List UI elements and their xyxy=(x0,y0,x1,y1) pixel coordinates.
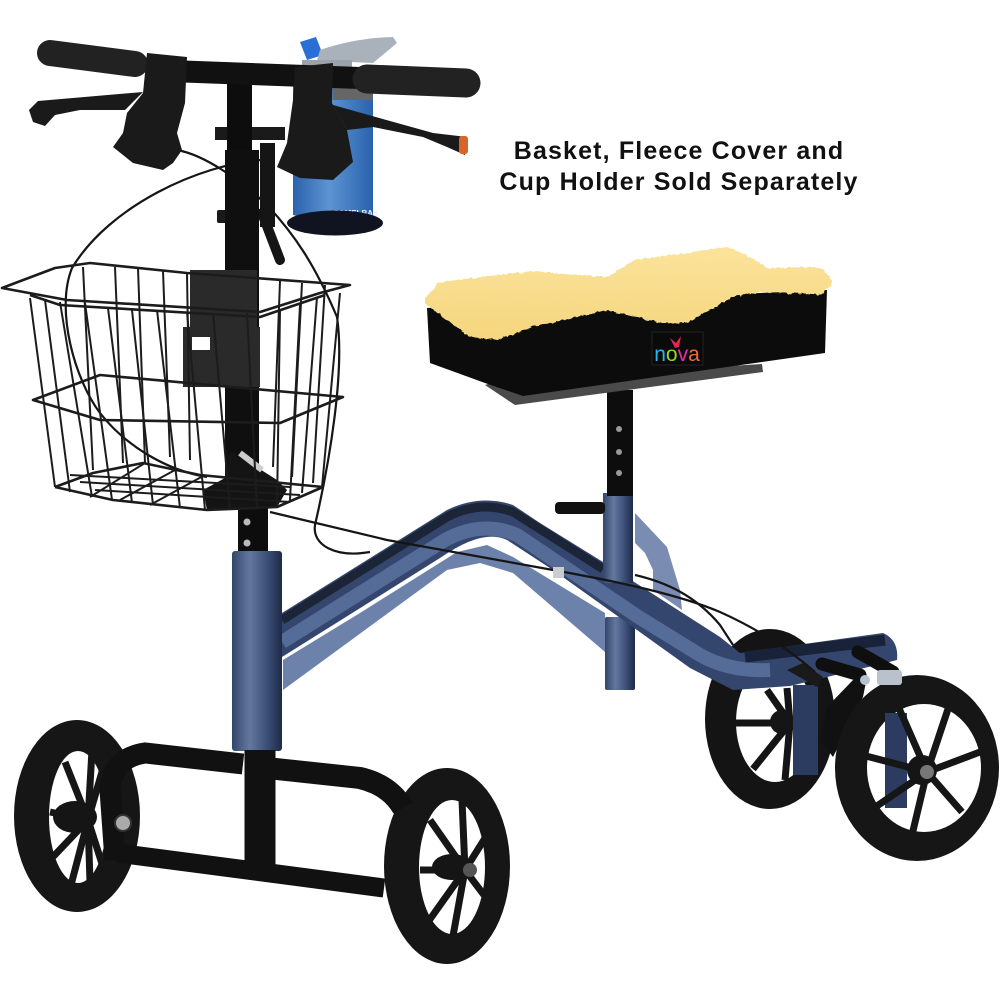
logo: nova xyxy=(652,332,703,366)
basket xyxy=(2,263,350,510)
steering tube xyxy=(232,505,282,751)
lower frame web plate xyxy=(283,545,605,690)
lower seat post socket xyxy=(605,617,635,690)
stem and rear bracket xyxy=(215,77,285,510)
handlebar xyxy=(50,53,466,83)
brake lever tip xyxy=(459,136,468,154)
cup holder xyxy=(287,210,383,236)
upper seat post socket xyxy=(603,493,633,583)
fleece cover xyxy=(425,247,832,340)
seat pad xyxy=(425,247,832,405)
water bottle xyxy=(293,37,397,220)
water bottle: CAMELBAK xyxy=(333,209,379,218)
rear back wheel xyxy=(705,629,835,809)
rear front wheel xyxy=(835,675,999,861)
seat post xyxy=(555,390,633,514)
brake cable xyxy=(66,150,815,672)
axle nut xyxy=(115,815,131,831)
basket lower mount xyxy=(203,450,287,510)
left brake lever xyxy=(29,92,143,126)
right brake clamp xyxy=(277,63,353,180)
rear fork plate xyxy=(820,677,867,757)
rear strut xyxy=(793,685,818,775)
logo: nova: nova xyxy=(654,343,700,366)
axle bolt and brake bracket xyxy=(787,663,902,687)
caption: sold separately note xyxy=(499,137,859,196)
left brake clamp xyxy=(113,53,187,170)
caption: sold separately note: Basket, Fleece Cover and xyxy=(514,137,844,165)
lower steering fork xyxy=(110,750,403,888)
front right wheel xyxy=(384,768,510,964)
right brake lever xyxy=(333,105,467,155)
front left wheel xyxy=(14,720,140,912)
rear axle tubes xyxy=(822,652,893,675)
rear seat bracket xyxy=(635,513,682,610)
caption: sold separately note: Cup Holder Sold Separately xyxy=(499,168,859,196)
basket bracket xyxy=(183,270,260,387)
cable connector xyxy=(553,567,564,578)
main frame tube xyxy=(282,501,897,690)
